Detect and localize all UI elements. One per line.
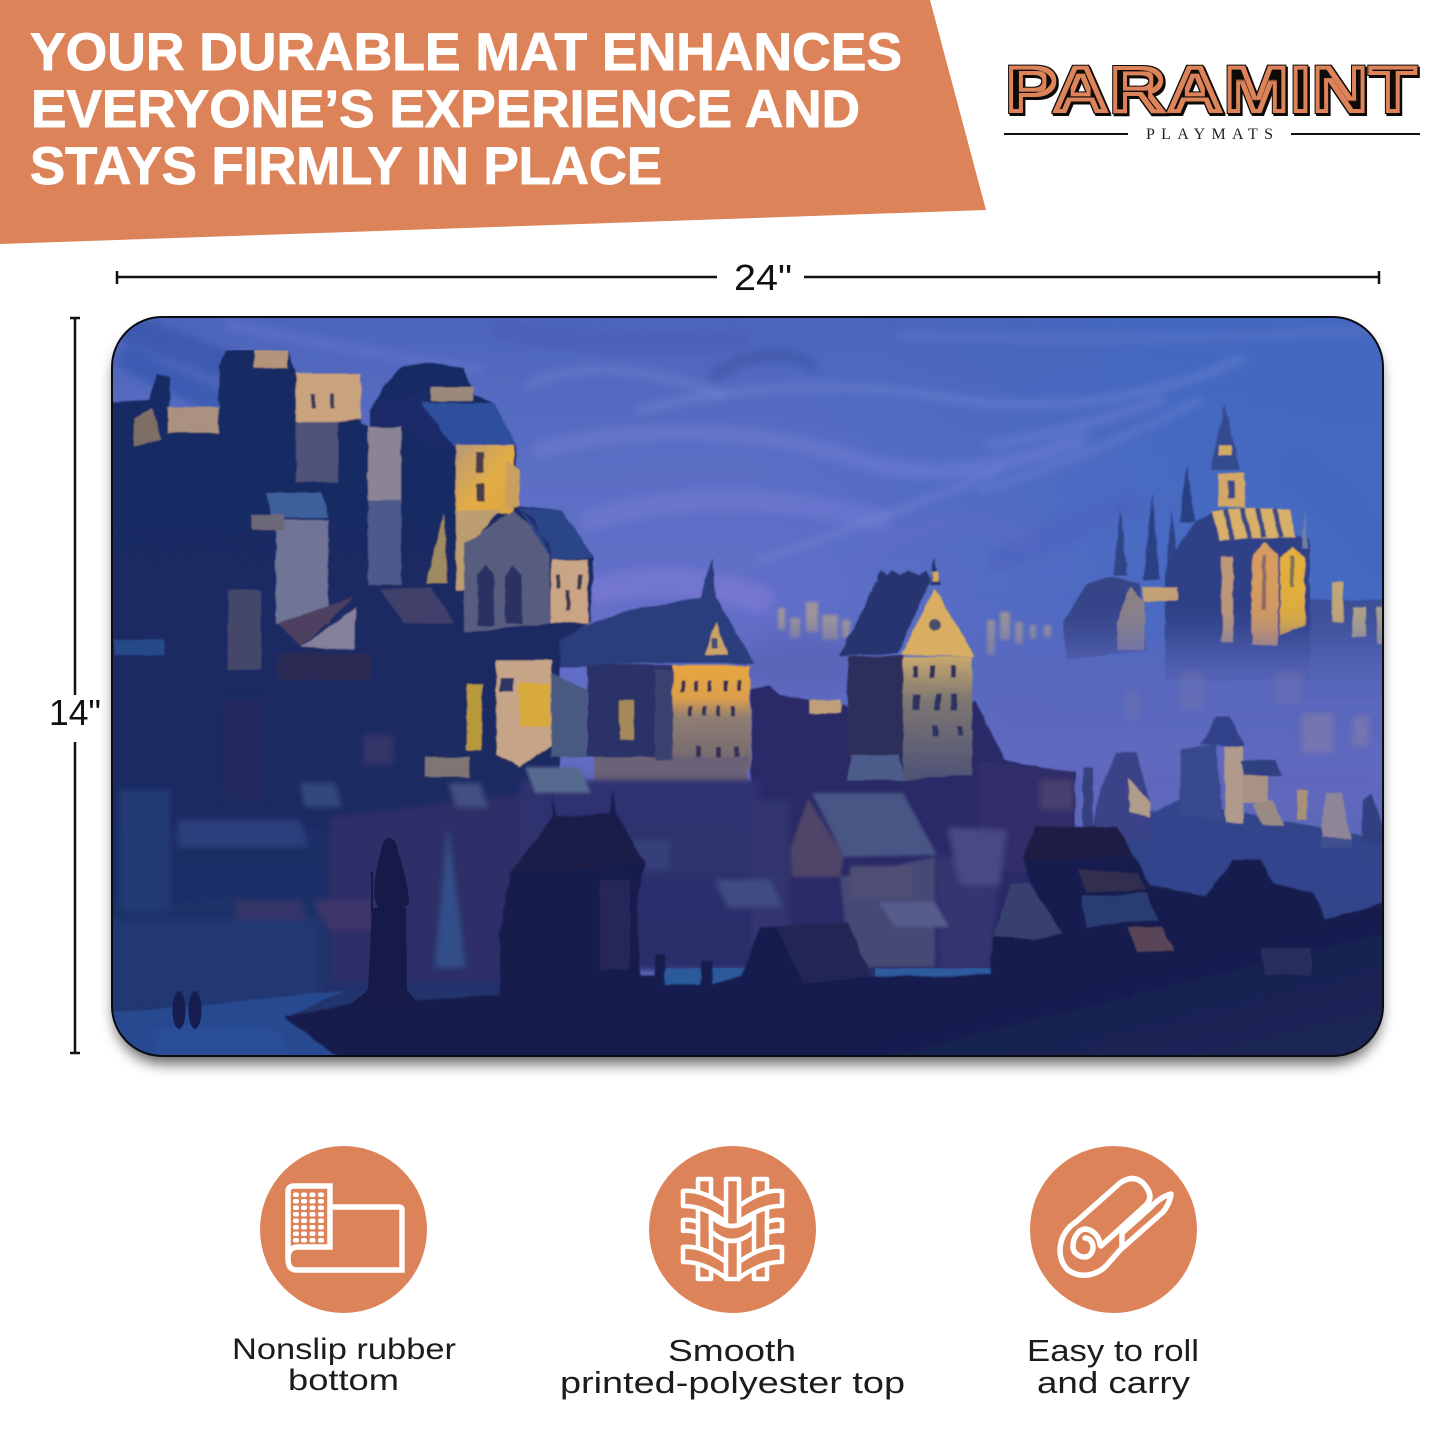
title: EVERYONE’S EXPERIENCE AND xyxy=(31,80,860,139)
logo: Paramint Playmats: PLAYMATS xyxy=(1146,126,1273,143)
left castle lit faces xyxy=(114,350,594,680)
city painting layers xyxy=(1063,404,1384,700)
title: YOUR DURABLE MAT ENHANCES xyxy=(30,23,902,82)
caption: Nonslip rubber xyxy=(232,1333,456,1366)
logo: Paramint Playmats xyxy=(1004,52,1420,143)
feature: smooth printed polyester top xyxy=(560,1146,905,1400)
caption: printed-polyester top xyxy=(560,1365,905,1400)
foreground shore and street xyxy=(111,968,1000,1062)
sky xyxy=(113,318,1382,976)
mat outline xyxy=(112,317,1383,1056)
ghost blocks in the fog xyxy=(1125,670,1369,753)
height dimension: 14 inches: 14" xyxy=(49,692,101,733)
lit lower wing and banner xyxy=(425,660,587,777)
caption: and carry xyxy=(1037,1365,1191,1400)
caption: Smooth xyxy=(668,1333,796,1368)
height dimension: 14 inches xyxy=(49,318,101,1053)
title: STAYS FIRMLY IN PLACE xyxy=(30,137,662,196)
distant lit rooftops xyxy=(778,602,1051,655)
icon: rolled mat xyxy=(1030,1146,1197,1313)
statue silhouette xyxy=(350,838,416,1006)
logo: Paramint Playmats: PARAMINT xyxy=(1005,52,1417,126)
feature: easy to roll and carry xyxy=(1027,1146,1199,1400)
header banner xyxy=(0,0,986,244)
foreground silhouettes of houses xyxy=(284,790,1384,1062)
caption xyxy=(232,1333,456,1397)
caption xyxy=(560,1333,905,1400)
middle town right xyxy=(1081,716,1382,920)
icon: woven fabric xyxy=(649,1146,816,1313)
central town mass xyxy=(751,685,1075,985)
distant castle on the right xyxy=(1063,404,1384,700)
awning lit from the square xyxy=(525,767,591,793)
playmat artwork: castle city at dusk xyxy=(111,316,1405,1062)
caption: bottom xyxy=(288,1364,399,1397)
caption: Easy to roll xyxy=(1027,1333,1199,1368)
left castle mass xyxy=(111,350,594,1057)
main hall with lit wing xyxy=(551,558,755,783)
feature: nonslip rubber bottom xyxy=(232,1146,456,1397)
width dimension: 24 inches xyxy=(117,257,1379,298)
figures on the road xyxy=(172,991,202,1029)
gabled house in the middle xyxy=(790,793,949,967)
caption xyxy=(1027,1333,1199,1400)
width dimension: 24 inches: 24" xyxy=(734,257,792,298)
icon: rubber backed mat xyxy=(260,1146,427,1313)
mat drop shadow xyxy=(114,328,1381,1064)
fog bank xyxy=(742,610,1382,736)
title xyxy=(30,23,902,196)
lower town seen through haze xyxy=(111,700,1073,1010)
central tower with gold gable xyxy=(839,557,975,780)
